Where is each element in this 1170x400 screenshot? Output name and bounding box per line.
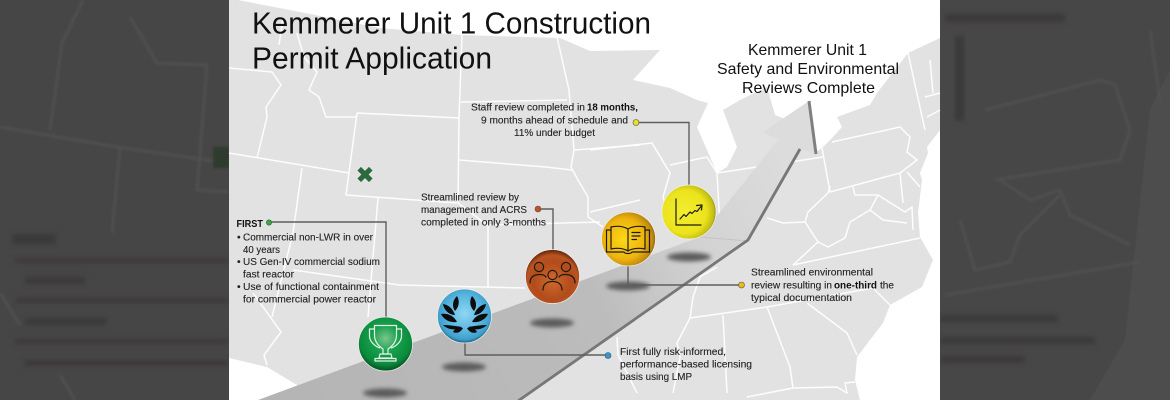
icon: trophy — [370, 326, 402, 361]
text block: first: for commercial power reactor — [243, 294, 377, 306]
ball: trophy — [358, 317, 412, 371]
text block: ACRS review — [421, 192, 546, 228]
dot: ACRS review — [535, 206, 541, 212]
text block: first: 40 years — [243, 245, 280, 256]
text block: staff review: 11% under budget — [514, 128, 595, 139]
text block: licensing: performance-based licensing — [620, 360, 752, 370]
text block: staff review: Staff review completed in — [471, 102, 585, 114]
heading: reviews complete: Reviews Complete — [742, 80, 875, 97]
text block: first: FIRST — [236, 219, 264, 230]
heading: reviews complete: Safety and Environmental — [717, 61, 899, 78]
dot: first — [266, 220, 272, 225]
icon: Kemmerer site marker — [358, 167, 372, 182]
ball: laurel — [438, 289, 492, 343]
title: Kemmerer Unit 1 Construction — [252, 6, 651, 40]
blurred background: right — [940, 0, 1170, 400]
text block: licensing — [620, 347, 752, 383]
ball shadows — [363, 252, 711, 398]
ball: trend chart — [662, 185, 716, 239]
text block: ACRS review: Streamlined review by — [421, 192, 520, 204]
dot: environmental — [738, 282, 744, 288]
text block: first: fast reactor — [243, 270, 295, 281]
dot: staff review — [633, 120, 639, 126]
text block: environmental: review resulting in — [751, 280, 832, 292]
text block: staff review: 9 months ahead of schedule and — [481, 116, 628, 126]
text block: licensing: basis using LMP — [620, 372, 692, 383]
text block: first — [236, 219, 380, 306]
blurred background: left — [0, 0, 229, 400]
text block: first: • — [237, 232, 241, 244]
heading: reviews complete — [717, 42, 899, 97]
state borders — [229, 18, 940, 397]
heading: reviews complete: Kemmerer Unit 1 — [748, 42, 867, 59]
title — [252, 6, 651, 76]
icon: three people — [530, 262, 575, 290]
text block: ACRS review: management and ACRS — [421, 205, 527, 216]
text block: environmental: the — [880, 280, 894, 292]
icon: open book — [606, 226, 650, 254]
connector: staff review — [636, 122, 689, 186]
growth arrow — [258, 101, 816, 400]
text block: environmental: one-third — [834, 280, 877, 292]
icon: line chart — [676, 199, 702, 225]
US map — [229, 0, 940, 400]
text block: environmental: typical documentation — [751, 293, 852, 304]
text block: first: • — [237, 257, 241, 268]
title: Permit Application — [252, 40, 492, 76]
center white panel — [229, 0, 940, 400]
connector: environmental — [628, 264, 741, 285]
text block: first: • — [237, 282, 241, 293]
text block: staff review — [471, 102, 638, 139]
ball: book — [602, 212, 656, 266]
text block: first: US Gen-IV commercial sodium — [243, 257, 380, 268]
text block: first: Use of functional containment — [243, 282, 379, 293]
text block: licensing: First fully risk-informed, — [620, 347, 726, 358]
ball: team — [526, 250, 580, 304]
connector: first — [269, 222, 386, 318]
text block: staff review: 18 months, — [587, 102, 638, 114]
dot: licensing — [605, 352, 611, 358]
icon: laurel wreath — [441, 296, 488, 333]
text block: first: Commercial non-LWR in over — [243, 232, 374, 244]
text block: environmental: Streamlined environmental — [751, 268, 873, 278]
connector: ACRS review — [538, 209, 553, 251]
text block: ACRS review: completed in only 3-months — [421, 218, 546, 228]
connector: licensing — [465, 342, 608, 355]
text block: environmental — [751, 268, 894, 304]
